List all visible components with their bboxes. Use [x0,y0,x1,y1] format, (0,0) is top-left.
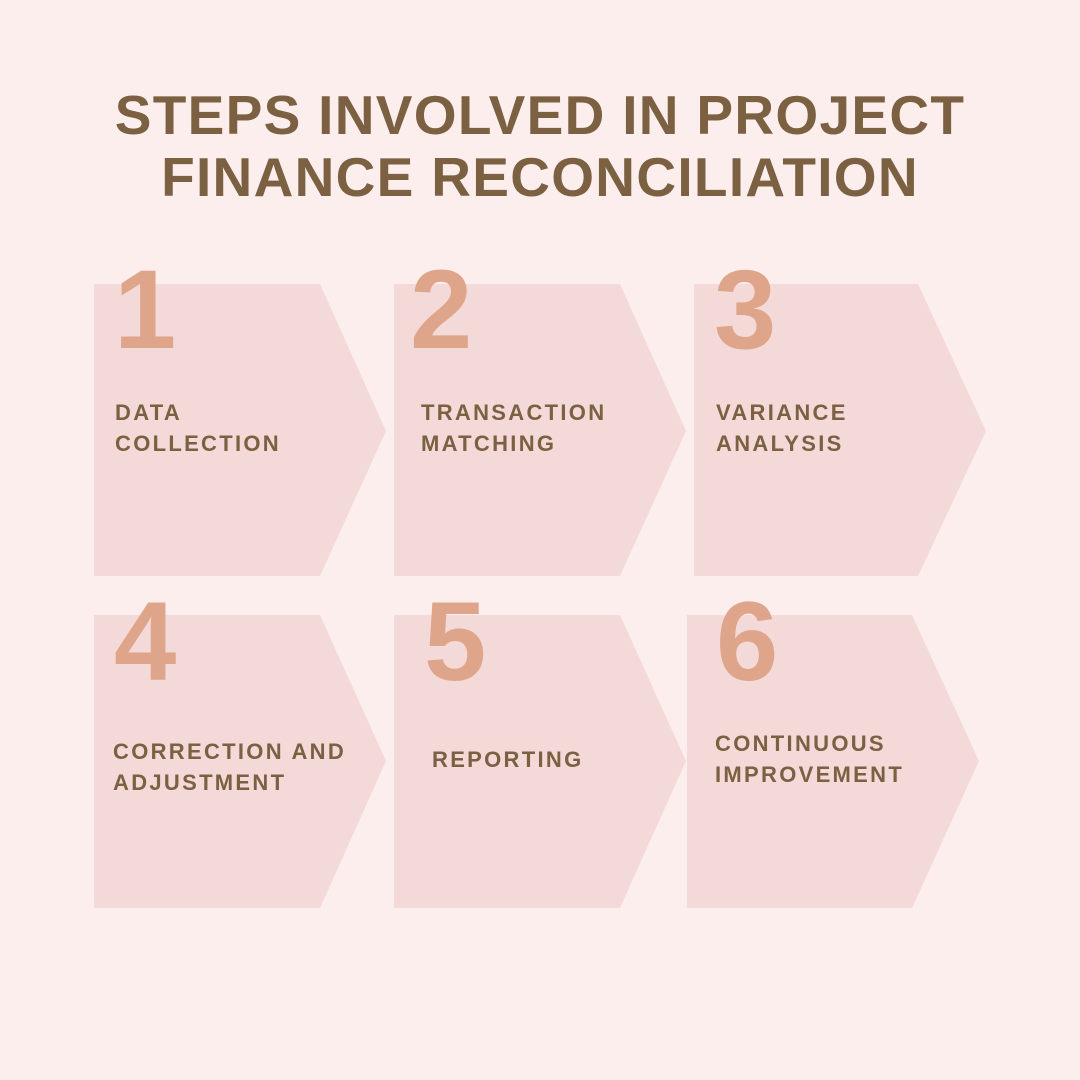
step 3 [714,247,848,456]
label 3: VARIANCE [716,400,848,425]
shape 6 [687,615,979,908]
step 5 [424,579,584,772]
step 6 [715,579,904,787]
number 6: 6 [716,579,778,704]
label 2: TRANSACTION [421,400,606,425]
label 4: CORRECTION AND [113,739,346,764]
label 4: ADJUSTMENT [113,770,286,795]
label 6: IMPROVEMENT [715,762,904,787]
label 1: DATA [115,400,182,425]
step 2 [410,247,606,456]
number 3: 3 [714,247,776,372]
label 5: REPORTING [432,747,584,772]
label 3: ANALYSIS [716,431,844,456]
shape 2 [394,284,686,576]
step 4 [113,579,346,795]
shape 1 [94,284,386,576]
number 1: 1 [114,247,176,372]
number 5: 5 [424,579,486,704]
number 2: 2 [410,247,472,372]
label 1: COLLECTION [115,431,281,456]
label 6: CONTINUOUS [715,731,886,756]
title: STEPS INVOLVED IN PROJECT [115,84,965,146]
label 4 [113,739,346,795]
label 2 [421,400,606,456]
shape 4 [94,615,386,908]
title: FINANCE RECONCILIATION [161,146,919,208]
label 2: MATCHING [421,431,556,456]
number 4: 4 [114,579,176,704]
shape 5 [394,615,686,908]
shape 3 [694,284,986,576]
label 6 [715,731,904,787]
label 3 [716,400,848,456]
step 1 [114,247,281,456]
label 1 [115,400,281,456]
title [115,84,965,208]
